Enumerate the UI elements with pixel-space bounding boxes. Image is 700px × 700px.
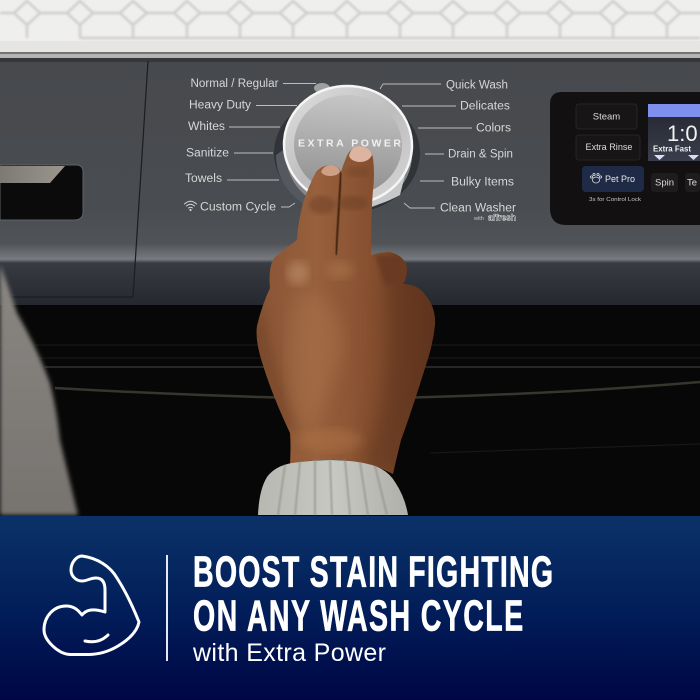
lcd display: Extra Fast xyxy=(653,144,691,154)
cycle labels on the left of the dial xyxy=(185,78,316,214)
temperature button: Te xyxy=(687,178,697,188)
cycle labels on the right of the dial: Clean Washer xyxy=(440,202,516,214)
control display panel xyxy=(550,92,700,225)
steam button xyxy=(576,104,637,129)
finger shading xyxy=(336,172,341,255)
cycle labels on the left of the dial: Towels xyxy=(185,173,222,185)
steam button: Steam xyxy=(593,112,620,122)
cycle labels on the left of the dial: Sanitize xyxy=(186,148,229,160)
hand pressing the dial xyxy=(250,140,440,480)
control lock caption: 3s for Control Lock xyxy=(589,197,641,203)
cycle labels on the left of the dial: Normal / Regular xyxy=(190,78,279,90)
headline: ON ANY WASH CYCLE xyxy=(193,590,523,640)
lcd display: 1:0 xyxy=(667,121,698,146)
cycle labels on the right of the dial: Colors xyxy=(476,122,511,134)
knit sweater cuff xyxy=(258,459,408,515)
cycle labels on the right of the dial: Quick Wash xyxy=(446,80,508,92)
extra rinse button: Extra Rinse xyxy=(586,142,632,153)
cycle labels on the right of the dial: affresh xyxy=(488,212,516,224)
divider xyxy=(166,555,168,661)
washer control panel xyxy=(0,58,700,305)
pet pro button: Pet Pro xyxy=(605,174,635,185)
cycle labels on the left of the dial: Custom Cycle xyxy=(200,202,276,214)
headline: BOOST STAIN FIGHTING xyxy=(193,546,553,596)
cycle labels on the left of the dial: Heavy Duty xyxy=(189,100,251,112)
subheading: with Extra Power xyxy=(192,639,386,667)
detergent drawer panel xyxy=(0,61,148,297)
lcd display xyxy=(648,104,700,161)
black door area below panel xyxy=(0,305,700,516)
background wall tile xyxy=(0,0,700,58)
dial label: EXTRA POWER xyxy=(298,138,401,150)
cycle labels on the right of the dial xyxy=(380,80,516,224)
icon: flexed bicep xyxy=(44,556,139,654)
fingernails xyxy=(321,146,372,176)
cycle labels on the right of the dial: with xyxy=(473,216,484,222)
drawer handle recess xyxy=(0,165,83,220)
dial: extra power xyxy=(274,82,420,213)
cycle labels on the left of the dial: Whites xyxy=(188,121,225,133)
left arm in grey sweater xyxy=(0,265,78,515)
bottom banner xyxy=(0,516,700,700)
headline xyxy=(193,546,553,640)
icon: wifi xyxy=(184,201,196,211)
cycle labels on the right of the dial: Drain & Spin xyxy=(448,148,513,160)
cycle labels on the right of the dial: Delicates xyxy=(460,100,510,112)
cycle labels on the right of the dial: Bulky Items xyxy=(451,176,514,188)
spin button xyxy=(651,173,678,192)
pet pro button xyxy=(582,166,644,192)
spin button: Spin xyxy=(655,178,674,188)
extra rinse button xyxy=(576,135,640,160)
temperature button xyxy=(685,173,700,192)
